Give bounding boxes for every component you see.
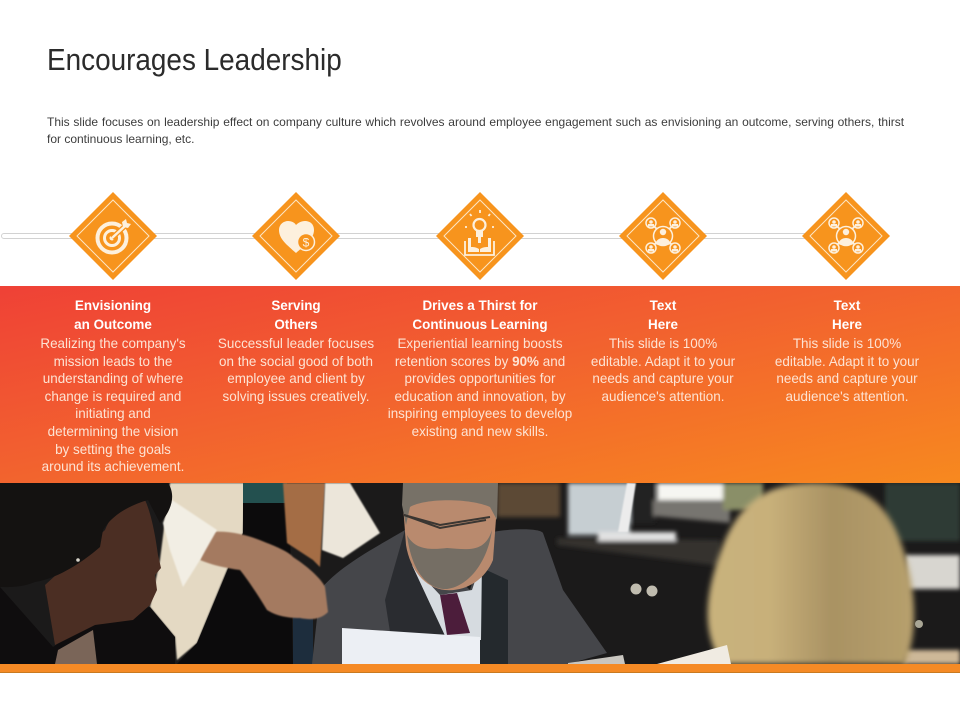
woman hair <box>0 483 172 587</box>
column: serving others: Successful leader focuses <box>218 335 374 351</box>
column: thirst for learning: education and innovation, by <box>394 388 566 404</box>
man shirt and tie <box>412 560 482 640</box>
intro text <box>47 115 904 146</box>
photo: business meeting <box>0 483 960 664</box>
column: thirst for learning: inspiring employees to develop <box>388 405 572 421</box>
column: thirst for learning: existing and new skills. <box>412 423 548 439</box>
column: serving others: Serving <box>271 297 321 313</box>
column: text here 1: needs and capture your <box>592 370 734 386</box>
column: envisioning an outcome <box>40 297 186 474</box>
icon: lightbulb over open book <box>436 192 524 280</box>
icon: heart with dollar coin <box>252 192 340 280</box>
cream blazer <box>150 483 245 660</box>
column: text here 1: editable. Adapt it to your <box>591 353 735 369</box>
column: text here 2: editable. Adapt it to your <box>775 353 919 369</box>
woman jacket <box>0 587 175 664</box>
white stand <box>618 483 636 532</box>
gradient panel <box>0 286 960 483</box>
connector line <box>1 233 818 239</box>
column: text here 2: Text <box>834 297 860 313</box>
laptop corner <box>568 655 625 664</box>
column: text here 1: This slide is 100% <box>609 335 717 351</box>
icon: people network <box>619 192 707 280</box>
earring <box>76 558 80 562</box>
title: Encourages Leadership <box>47 42 342 77</box>
column: envisioning an outcome: mission leads to the <box>54 353 172 369</box>
man head <box>403 492 497 590</box>
column: envisioning an outcome: determining the vision <box>48 423 178 439</box>
column: text here 2: audience's attention. <box>786 388 908 404</box>
column: text here 1 <box>591 297 735 404</box>
column: envisioning an outcome: Envisioning <box>75 297 151 313</box>
icon: target <box>69 192 157 280</box>
column: envisioning an outcome: by setting the goals <box>55 441 171 457</box>
man suit <box>312 529 607 664</box>
column: thirst for learning: Experiential learning boosts <box>397 335 563 351</box>
column: text here 2: Here <box>832 316 862 332</box>
column: thirst for learning <box>388 297 572 439</box>
column: serving others: solving issues creatively. <box>223 388 369 404</box>
column: serving others: Others <box>274 316 318 332</box>
column: text here 1: Here <box>648 316 678 332</box>
blonde person <box>708 483 914 664</box>
column: envisioning an outcome: understanding of where <box>43 370 183 386</box>
orange footer bar <box>0 664 960 673</box>
column: thirst for learning: Continuous Learning <box>412 316 548 332</box>
intro text: for continuous learning, etc. <box>47 132 194 146</box>
column: thirst for learning: Drives a Thirst for <box>422 297 538 313</box>
column: text here 2 <box>775 297 919 404</box>
column: text here 1: Text <box>650 297 676 313</box>
white cuff <box>163 500 217 587</box>
icon: people network second <box>802 192 890 280</box>
column: text here 1: audience's attention. <box>602 388 724 404</box>
column: thirst for learning: provides opportunities for <box>405 370 555 386</box>
column: serving others <box>218 297 374 404</box>
woman neck and face <box>45 500 161 645</box>
icon row <box>69 192 890 280</box>
column: text here 2: needs and capture your <box>776 370 918 386</box>
column: serving others: on the social good of both <box>219 353 373 369</box>
paper <box>342 628 480 664</box>
column: envisioning an outcome: an Outcome <box>74 316 152 332</box>
column: envisioning an outcome: change is required and <box>45 388 181 404</box>
column: text here 2: This slide is 100% <box>793 335 901 351</box>
intro text: This slide focuses on leadership effect on company culture which revolves around employee engagement such as envisioning an outcome, serving others, thirst <box>47 115 904 129</box>
pointing arm <box>200 532 328 619</box>
column: envisioning an outcome: Realizing the company's <box>40 335 186 351</box>
cabinet knobs <box>630 584 642 594</box>
office background <box>497 483 960 664</box>
column: serving others: employee and client by <box>227 370 365 386</box>
icon: heart with dollar coin: $ <box>303 236 310 250</box>
column: envisioning an outcome: initiating and <box>75 405 151 421</box>
column: thirst for learning: retention scores by 90% and <box>395 353 565 369</box>
column: envisioning an outcome: around its achievement. <box>42 458 184 474</box>
